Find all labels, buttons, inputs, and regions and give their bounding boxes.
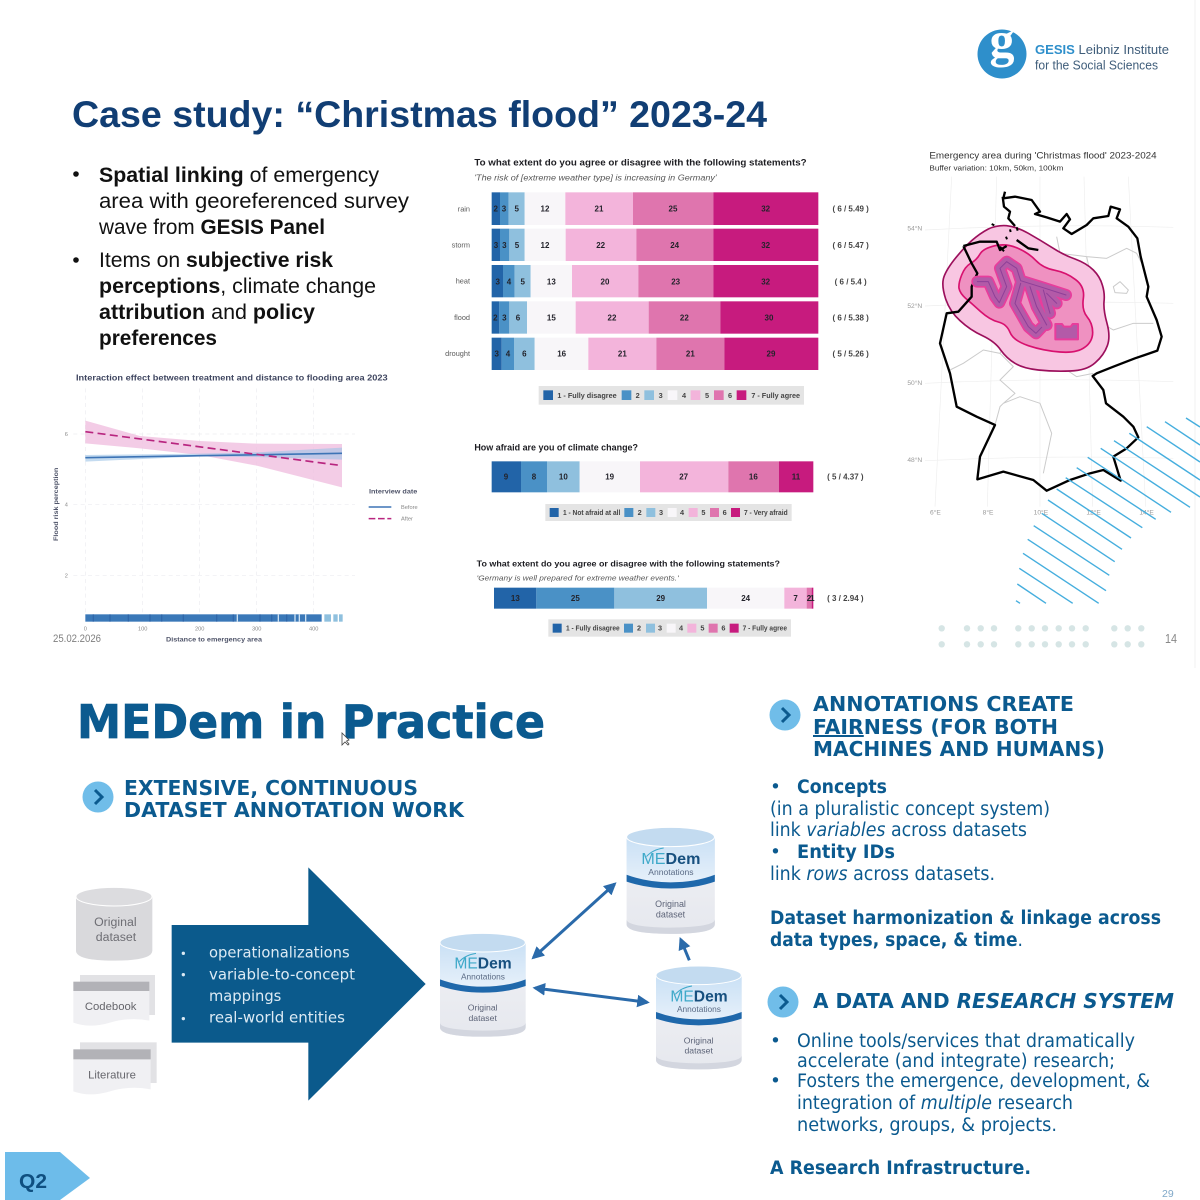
bar: drought: 4 — [506, 350, 511, 359]
cylinder: top right: Original — [655, 899, 686, 909]
bar: drought: ( 5 / 5.26 ) — [832, 350, 869, 359]
tag: Q2: Q2 — [19, 1171, 47, 1193]
diagram: linked MEDem datasets — [440, 827, 742, 1069]
bar: rain: 3 — [502, 205, 507, 214]
text: research infrastructure: A Research Infrastructure. — [770, 1158, 1031, 1179]
bar: drought: 21 — [618, 350, 627, 359]
bar: storm: storm — [452, 241, 470, 250]
bar: flood: 2 — [493, 314, 498, 323]
bar: rain: 32 — [761, 205, 771, 214]
buffer: 50km — [959, 245, 1093, 352]
bar: storm: ( 6 / 5.47 ) — [832, 241, 869, 250]
bar: drought: 29 — [767, 350, 776, 359]
title: Case study: Case study: “Christmas flood” 2023-24 — [72, 94, 767, 135]
bar: climate fear: 9 — [504, 473, 509, 482]
text block: bullet list: attribution and policy — [99, 300, 315, 324]
legend: preparedness scale: 3 — [658, 623, 662, 632]
cylinder: left: dataset — [468, 1013, 497, 1023]
buffer: 100km — [943, 226, 1109, 371]
bar: storm: 24 — [670, 241, 680, 250]
bar: storm: 32 — [761, 241, 771, 250]
cylinder: bottom right: dataset — [684, 1046, 713, 1056]
text block: bullet list: perceptions, climate change — [99, 274, 376, 298]
legend: fear scale — [545, 504, 792, 521]
text block: concepts and entity IDs — [770, 777, 1050, 885]
text block: research system bullets: Fosters the emergence, development, & — [797, 1071, 1150, 1092]
arrow: bottom right to top right — [681, 939, 689, 960]
chart: climate fear and preparedness — [474, 443, 864, 637]
bar: heat: 32 — [761, 277, 771, 286]
bar: preparedness: 24 — [741, 594, 751, 603]
arrow: annotation process: mappings — [209, 987, 282, 1005]
icon: chevron dataset annotation — [82, 782, 114, 812]
legend: agreement scale: 3 — [659, 391, 663, 400]
icon: codebook document — [73, 975, 155, 1026]
bar: storm: 5 — [515, 241, 520, 250]
logo: GESIS — [978, 12, 1169, 78]
heading: annotations create fairness: MACHINES AND HUMANS) — [813, 737, 1105, 761]
bar: drought: 6 — [522, 350, 527, 359]
heading: data and research system: A DATA AND RESEARCH SYSTEM — [813, 989, 1174, 1013]
legend: interview date: Interview date — [369, 488, 418, 495]
legend: agreement scale: 2 — [636, 391, 640, 400]
bar: drought: 16 — [557, 350, 567, 359]
icon: original dataset cylinder: dataset — [96, 930, 137, 944]
y axis: 2 — [65, 573, 68, 579]
cylinder: bottom right: Original — [684, 1035, 714, 1045]
bar: storm: 12 — [541, 241, 550, 250]
bar: heat: 5 — [520, 277, 525, 286]
buffer: 10km rivers — [977, 262, 1078, 339]
bar: drought — [445, 338, 869, 370]
arrow: left to top right — [533, 884, 615, 958]
logo wordmark: for the Social Sciences — [1035, 58, 1158, 72]
tag: Q2 — [5, 1152, 90, 1200]
heading: preparedness: To what extent do you agree or disagree with the following statements? — [477, 558, 780, 568]
x axis: Distance to emergency area — [166, 637, 262, 644]
legend: preparedness scale: 1 - Fully disagree — [566, 623, 620, 632]
legend: preparedness scale: 4 — [679, 623, 684, 632]
bar: storm: 3 — [494, 241, 499, 250]
chart: interaction effect line chart — [53, 372, 418, 644]
x axis: 0 — [84, 626, 87, 632]
bar: preparedness: 29 — [656, 594, 666, 603]
y axis: 6 — [65, 432, 68, 438]
x axis: 300 — [252, 626, 261, 632]
cylinder: bottom right: Annotations — [677, 1004, 721, 1014]
icon: GESIS circle: g — [990, 12, 1014, 68]
legend: interview date — [369, 488, 418, 523]
bar: rain: ( 6 / 5.49 ) — [832, 205, 869, 214]
bar: heat: 23 — [671, 277, 681, 286]
bar: flood — [454, 301, 869, 334]
line: after — [85, 432, 342, 466]
bar: rain: 21 — [595, 205, 604, 214]
arrow: annotation process: operationalizations — [209, 944, 350, 962]
text block: research system bullets — [770, 1031, 1150, 1136]
text block: research system bullets: • — [770, 1071, 781, 1092]
map subtitle: Buffer variation: 10km, 50km, 100km — [929, 164, 1063, 173]
heading: annotations create fairness: ANNOTATIONS CREATE — [813, 692, 1074, 716]
text block: concepts and entity IDs: link variables across datasets — [770, 820, 1027, 841]
text block: concepts and entity IDs: link rows across datasets. — [770, 864, 995, 885]
map axis labels: 54°N — [907, 225, 922, 233]
text block: research system bullets: accelerate (and integrate) research; — [797, 1051, 1115, 1072]
legend: interview date: Before — [401, 505, 418, 511]
cylinder: top right: MEDem — [641, 851, 700, 868]
text block: bullet list: preferences — [99, 326, 217, 350]
map title: Emergency area during 'Christmas flood' 2023-2024 — [929, 151, 1157, 161]
legend: preparedness scale: 7 - Fully agree — [743, 623, 787, 632]
bar: flood: 22 — [608, 314, 617, 323]
bar: climate fear — [492, 461, 864, 492]
legend: fear scale: 5 — [701, 508, 705, 517]
icon: GESIS circle — [978, 12, 1026, 78]
cylinder: left — [440, 933, 526, 1037]
bar: heat: 13 — [547, 277, 556, 286]
legend: fear scale: 2 — [638, 508, 642, 517]
bar: flood: 15 — [547, 314, 556, 323]
bar: preparedness: 1 — [810, 594, 815, 603]
cylinder: left: Original — [468, 1003, 498, 1013]
map axis labels — [907, 225, 1154, 517]
text block: research system bullets: integration of multiple research — [797, 1093, 1073, 1114]
bar: drought: 3 — [494, 350, 499, 359]
legend: fear scale: 1 - Not afraid at all — [563, 508, 620, 517]
text block: concepts and entity IDs: • — [770, 777, 781, 798]
bar: storm — [452, 229, 869, 261]
bar: climate fear: 16 — [749, 473, 758, 482]
cylinder: top right — [627, 827, 715, 934]
y axis: 4 — [65, 503, 68, 509]
icon: chevron research system — [768, 986, 798, 1018]
map: Germany emergency area — [907, 151, 1173, 517]
islands and estuary detail — [992, 224, 1018, 251]
text block: harmonization: Dataset harmonization & linkage across — [770, 908, 1161, 929]
legend: agreement scale: 4 — [682, 391, 687, 400]
chart heading: To what extent do you agree or disagree with the following statements? — [474, 157, 807, 167]
heading: dataset annotation work: EXTENSIVE, CONTINUOUS — [124, 776, 418, 800]
line: before — [85, 453, 342, 458]
bar: storm: 3 — [502, 241, 507, 250]
diagram: source documents to arrow — [73, 867, 426, 1101]
text block: harmonization: data types, space, & time. — [770, 930, 1023, 951]
bar: drought: 21 — [686, 350, 695, 359]
logo wordmark — [1035, 42, 1169, 72]
legend: preparedness scale: 5 — [700, 623, 704, 632]
bar: preparedness: 13 — [511, 594, 520, 603]
decorative dots — [938, 625, 1145, 648]
bar: heat: ( 6 / 5.4 ) — [835, 277, 867, 286]
legend: fear scale: 6 — [723, 508, 727, 517]
bar: preparedness: 25 — [571, 594, 580, 603]
arrow: annotation process: variable-to-concept — [209, 965, 355, 983]
legend: agreement scale — [539, 386, 804, 405]
y axis: Flood risk perception — [53, 468, 60, 541]
bar: storm: 22 — [596, 241, 606, 250]
text block: bullet list — [73, 163, 409, 350]
legend: agreement scale: 7 - Fully agree — [751, 391, 800, 400]
cylinder: top right: dataset — [656, 910, 686, 920]
text block: research system bullets: Online tools/services that dramatically — [797, 1031, 1135, 1052]
map axis labels: 48°N — [907, 456, 922, 464]
bar: rain: rain — [458, 204, 470, 213]
bar: drought: drought — [445, 349, 470, 358]
map axis labels: 12°E — [1086, 509, 1101, 517]
bar: preparedness: 2 — [807, 594, 812, 603]
arrow: annotation process: real-world entities — [209, 1009, 345, 1027]
x axis: 100 — [138, 626, 147, 632]
subtitle: preparedness: 'Germany is well prepared for extreme weather events.' — [477, 574, 679, 583]
map axis labels: 52°N — [907, 302, 922, 310]
map axis labels: 8°E — [983, 509, 994, 517]
heading: climate fear: How afraid are you of climate change? — [474, 443, 638, 453]
bar: climate fear: 11 — [792, 473, 801, 482]
bar: flood: 22 — [680, 314, 689, 323]
confidence band: before — [85, 448, 342, 462]
bar: flood: 30 — [765, 314, 774, 323]
bar: flood: flood — [454, 313, 470, 322]
icon: original dataset cylinder: Original — [94, 915, 137, 929]
legend: agreement scale: 5 — [705, 391, 709, 400]
cylinder: left: MEDem — [454, 956, 512, 973]
bar: climate fear: 10 — [559, 473, 568, 482]
bar: rain — [458, 192, 869, 225]
text block: concepts and entity IDs: Concepts — [797, 777, 887, 798]
heading: dataset annotation work — [124, 776, 466, 822]
map axis labels: 10°E — [1034, 509, 1049, 517]
x axis — [84, 626, 318, 644]
bar: rain: 12 — [541, 205, 550, 214]
text block: harmonization — [770, 908, 1161, 951]
text block: concepts and entity IDs: (in a pluralistic concept system) — [770, 799, 1050, 820]
icon: literature document: Literature — [88, 1070, 136, 1082]
bar: flood: 6 — [516, 314, 521, 323]
bar: heat: 4 — [507, 277, 512, 286]
bar: climate fear: 27 — [679, 473, 689, 482]
outline: Germany — [940, 192, 1162, 491]
x axis: 200 — [195, 626, 204, 632]
logo wordmark: GESIS Leibniz Institute — [1035, 42, 1169, 57]
bar: preparedness — [494, 588, 864, 609]
bar: rain: 25 — [669, 205, 678, 214]
legend: agreement scale: 6 — [728, 391, 732, 400]
bar: heat: 3 — [495, 277, 500, 286]
text block: bullet list: Spatial linking of emergency — [99, 163, 379, 187]
icon: chevron fairness — [770, 700, 800, 730]
title: MEDem in Practice: MEDem in Practice — [77, 695, 545, 749]
legend: preparedness scale: 6 — [721, 623, 725, 632]
text block: research system bullets: networks, groups, & projects. — [797, 1115, 1057, 1136]
legend: fear scale: 7 - Very afraid — [744, 508, 788, 517]
legend: fear scale: 4 — [680, 508, 685, 517]
icon: literature document — [73, 1042, 157, 1094]
chart: extreme weather risk stacked bars and climate fear — [445, 157, 869, 405]
bar: preparedness: 7 — [793, 594, 798, 603]
arrow: left to bottom right — [535, 988, 647, 1002]
heading: annotations create fairness — [813, 692, 1105, 761]
bar: climate fear: ( 5 / 4.37 ) — [827, 473, 864, 482]
bar: rain: 5 — [514, 205, 519, 214]
map axis labels: 6°E — [930, 509, 941, 517]
x axis: 400 — [309, 626, 318, 632]
heading: dataset annotation work: DATASET ANNOTATION WORK — [124, 798, 466, 822]
text block: bullet list: Items on subjective risk — [99, 248, 333, 272]
cylinder: bottom right: MEDem — [670, 988, 728, 1005]
chart subtitle: 'The risk of [extreme weather type] is increasing in Germany' — [474, 173, 717, 183]
bar: flood: ( 6 / 5.38 ) — [832, 314, 869, 323]
decorative hatch pattern — [1016, 418, 1200, 603]
text block: concepts and entity IDs: • — [770, 842, 781, 863]
text block: concepts and entity IDs: Entity IDs — [797, 842, 895, 863]
icon: original dataset cylinder — [76, 887, 152, 961]
state borders — [950, 237, 1153, 473]
bar: rain: 2 — [493, 205, 498, 214]
text block: research system bullets: • — [770, 1031, 781, 1052]
bar: preparedness: ( 3 / 2.94 ) — [827, 594, 864, 603]
icon: codebook document: Codebook — [85, 1001, 137, 1013]
bar: heat — [456, 265, 867, 297]
cylinder: left: Annotations — [461, 971, 505, 981]
legend: fear scale: 3 — [659, 508, 663, 517]
bar: heat: 20 — [601, 277, 610, 286]
arrow: annotation process — [172, 867, 426, 1101]
bar: climate fear: 19 — [605, 473, 615, 482]
page number 14: 14 — [1165, 632, 1177, 646]
cylinder: top right: Annotations — [648, 867, 694, 877]
confidence band: after — [85, 421, 342, 487]
icon: mouse cursor — [342, 733, 349, 745]
y axis — [53, 432, 68, 579]
legend: agreement scale: 1 - Fully disagree — [557, 391, 617, 400]
text block: bullet list: wave from GESIS Panel — [98, 215, 325, 239]
date: 25.02.2026 — [53, 633, 101, 645]
bar: climate fear: 8 — [532, 473, 537, 482]
map axis labels: 14°E — [1139, 509, 1154, 517]
chart title: Interaction effect between treatment and distance to flooding area 2023 — [76, 372, 388, 382]
heading: annotations create fairness: FAIRNESS (FOR BOTH — [813, 715, 1058, 739]
bar: flood: 3 — [502, 314, 507, 323]
cylinder: bottom right — [656, 966, 742, 1069]
page number 29: 29 — [1162, 1188, 1174, 1200]
legend: interview date: After — [401, 517, 413, 523]
map axis labels: 50°N — [907, 379, 922, 387]
rug plot — [85, 614, 343, 622]
text block: bullet list: area with georeferenced survey — [99, 189, 409, 213]
legend: preparedness scale — [548, 619, 791, 637]
legend: preparedness scale: 2 — [637, 623, 641, 632]
bar: heat: heat — [456, 277, 470, 286]
